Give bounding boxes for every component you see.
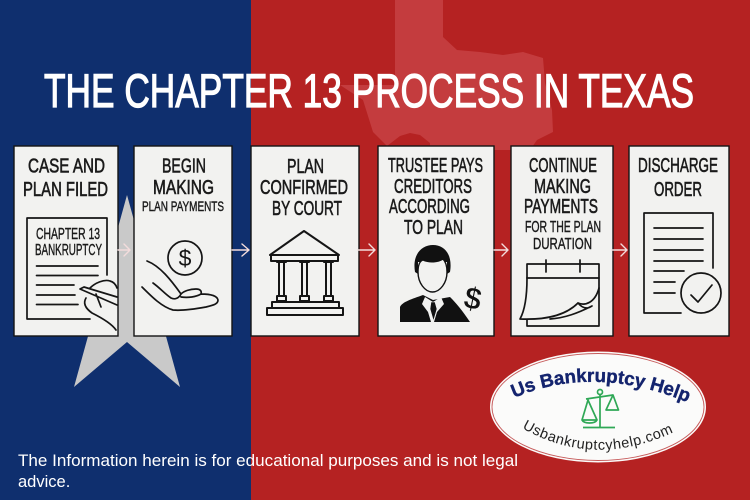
heading: plan confirmed by court [260,156,348,220]
icon: hand receiving dollar coin: $ [179,245,192,271]
heading: case and plan filed [23,156,108,201]
heading: plan confirmed by court: BY COURT [272,198,342,220]
heading: begin making plan payments: BEGIN [162,156,206,178]
heading: discharge order: ORDER [654,179,702,201]
Texas state silhouette [340,0,553,150]
disclaimer [18,452,518,491]
panel: begin making plan payments [134,146,232,336]
panel: discharge order [629,146,729,336]
panel: plan confirmed by court [251,146,359,336]
arrow 2 [232,244,249,256]
icon: document with check mark [644,213,721,313]
heading: trustee pays creditors according to plan [388,155,483,239]
heading: continue making payments for the plan duration: FOR THE PLAN [525,219,601,236]
icon: calendar with curling page [520,260,599,326]
heading: begin making plan payments [142,156,224,214]
heading: continue making payments for the plan duration: MAKING [534,176,591,198]
heading: begin making plan payments: MAKING [153,177,214,199]
panel: trustee pays creditors [378,146,494,336]
lone star [74,195,180,387]
icon: trustee with dollar sign [400,245,485,322]
arrow 1 [118,244,130,256]
icon: bankruptcy document being signed: BANKRUPTCY [35,242,102,259]
heading: trustee pays creditors according to plan: TRUSTEE PAYS [388,155,483,177]
panel: case and plan filed [14,146,118,336]
heading: continue making payments for the plan duration: CONTINUE [529,155,597,177]
heading: trustee pays creditors according to plan: CREDITORS [394,176,472,198]
heading: plan confirmed by court: CONFIRMED [260,177,348,199]
arrow 3 [358,244,375,256]
icon: bankruptcy document being signed [27,218,117,331]
heading: trustee pays creditors according to plan: TO PLAN [404,217,463,239]
logo web address: Usbankruptcyhelp.com [524,420,672,453]
heading: continue making payments for the plan duration [524,155,601,253]
icon: bankruptcy document being signed: CHAPTER 13 [36,226,100,243]
heading: plan confirmed by court: PLAN [287,156,324,178]
heading: case and plan filed: PLAN FILED [23,179,108,201]
heading: begin making plan payments: PLAN PAYMENTS [142,198,224,214]
heading: discharge order [638,155,718,201]
logo name: Us Bankruptcy Help [510,368,690,404]
icon: green scales of justice [582,390,618,428]
heading: case and plan filed: CASE AND [28,156,105,178]
disclaimer: The Information herein is for educational purposes and is not legal [18,452,518,470]
heading: trustee pays creditors according to plan: ACCORDING [389,196,470,218]
background: red field [251,0,750,500]
heading: continue making payments for the plan duration: DURATION [533,236,592,253]
logo badge: Us Bankruptcy Help [490,352,706,462]
arrow 4 [494,244,508,256]
panel: continue making payments [511,146,613,336]
heading: continue making payments for the plan duration: PAYMENTS [524,196,598,218]
icon: courthouse [267,231,343,315]
arrow 5 [612,244,627,256]
icon: trustee with dollar sign: $ [461,280,485,317]
disclaimer: advice. [18,473,70,491]
icon: hand receiving dollar coin [142,241,218,310]
background: blue field [0,0,251,500]
